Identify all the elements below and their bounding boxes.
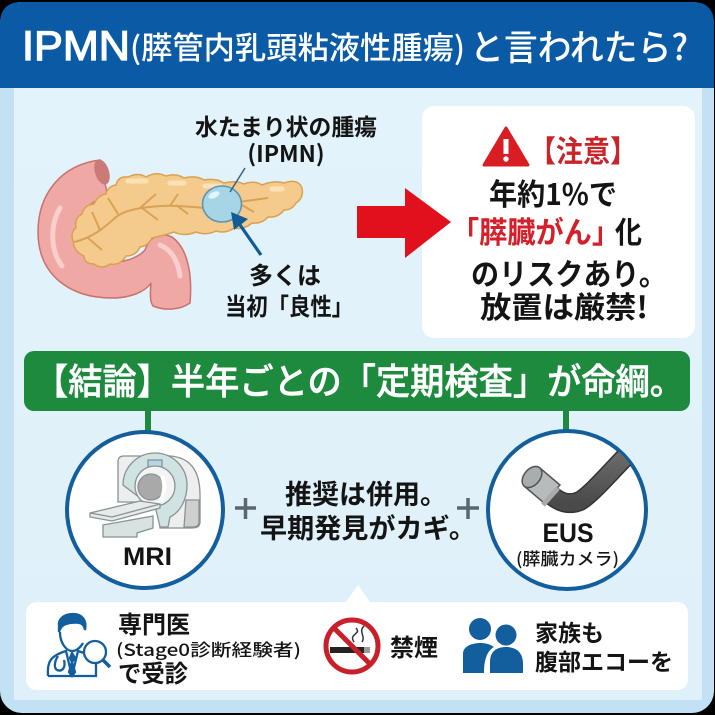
- EUS sublabel: (膵臓カメラ): [516, 545, 619, 570]
- pancreatic duct: [74, 194, 268, 250]
- label: benign: [225, 256, 353, 322]
- family line 1: 家族も: [535, 614, 604, 648]
- icon: doctor: [48, 614, 110, 676]
- text: recommended combination: 推奨は併用。: [285, 473, 447, 512]
- text: recommended combination: [260, 473, 476, 546]
- icon: MRI scanner: [90, 453, 200, 537]
- circle: MRI: [67, 432, 223, 588]
- cyst highlight: [207, 190, 221, 200]
- pancreas illustration: [38, 157, 302, 309]
- pancreas body: [72, 174, 302, 267]
- label: cyst: 水たまり状の腫瘍: [195, 108, 377, 142]
- caution line 2 suffix: 化: [615, 208, 642, 252]
- duodenum opening: [91, 157, 113, 187]
- specialist line 1: 専門医: [118, 605, 190, 640]
- arrow to cyst: [231, 212, 261, 255]
- duodenum highlight: [53, 208, 180, 276]
- connector left: [145, 411, 151, 431]
- text: recommended combination: 早期発見がカギ。: [260, 507, 476, 546]
- caution line 3: のリスクあり。: [471, 250, 667, 294]
- label: benign: 多くは: [249, 256, 321, 291]
- family line 2: 腹部エコーを: [535, 643, 673, 677]
- icon: family: [463, 618, 523, 673]
- title subtitle: (膵管内乳頭粘液性腫瘍): [130, 23, 465, 68]
- icon: no smoking: [326, 620, 378, 672]
- caution line 2: 「膵臓がん」: [451, 208, 620, 252]
- conclusion banner: [24, 351, 690, 411]
- header band: [0, 2, 714, 88]
- lobule highlights: [128, 181, 282, 189]
- circle: EUS: [488, 431, 646, 589]
- connector right: [563, 411, 569, 431]
- EUS label: EUS: [542, 518, 594, 548]
- banner text: 【結論】半年ごとの「定期検査」が命綱。: [34, 353, 684, 405]
- MRI label: MRI: [123, 543, 172, 571]
- title ending: と言われたら?: [470, 19, 688, 71]
- panel: caution: [422, 106, 695, 338]
- caution line 4: 放置は厳禁!: [480, 283, 648, 327]
- label: benign: 当初「良性」: [225, 287, 353, 322]
- label: cyst: (IPMN): [247, 135, 325, 169]
- no smoking label: 禁煙: [390, 628, 438, 663]
- specialist line 3: で受診: [118, 654, 188, 689]
- caution line 1: 年約1%で: [489, 170, 617, 214]
- duodenum: [38, 160, 191, 309]
- bottom panel: [26, 585, 688, 690]
- title: IPMN: [22, 22, 130, 69]
- caution heading: 【注意】: [529, 127, 637, 171]
- icon: endoscope: [518, 448, 634, 505]
- plus right: [457, 498, 479, 519]
- icon: warning triangle: [484, 128, 528, 165]
- leader line to cyst: [230, 168, 245, 192]
- label: cyst: [195, 108, 377, 169]
- plus left: [235, 498, 256, 519]
- red arrow: [357, 188, 451, 258]
- cyst: [202, 186, 242, 222]
- specialist line 2: (Stage0診断経験者): [116, 636, 301, 661]
